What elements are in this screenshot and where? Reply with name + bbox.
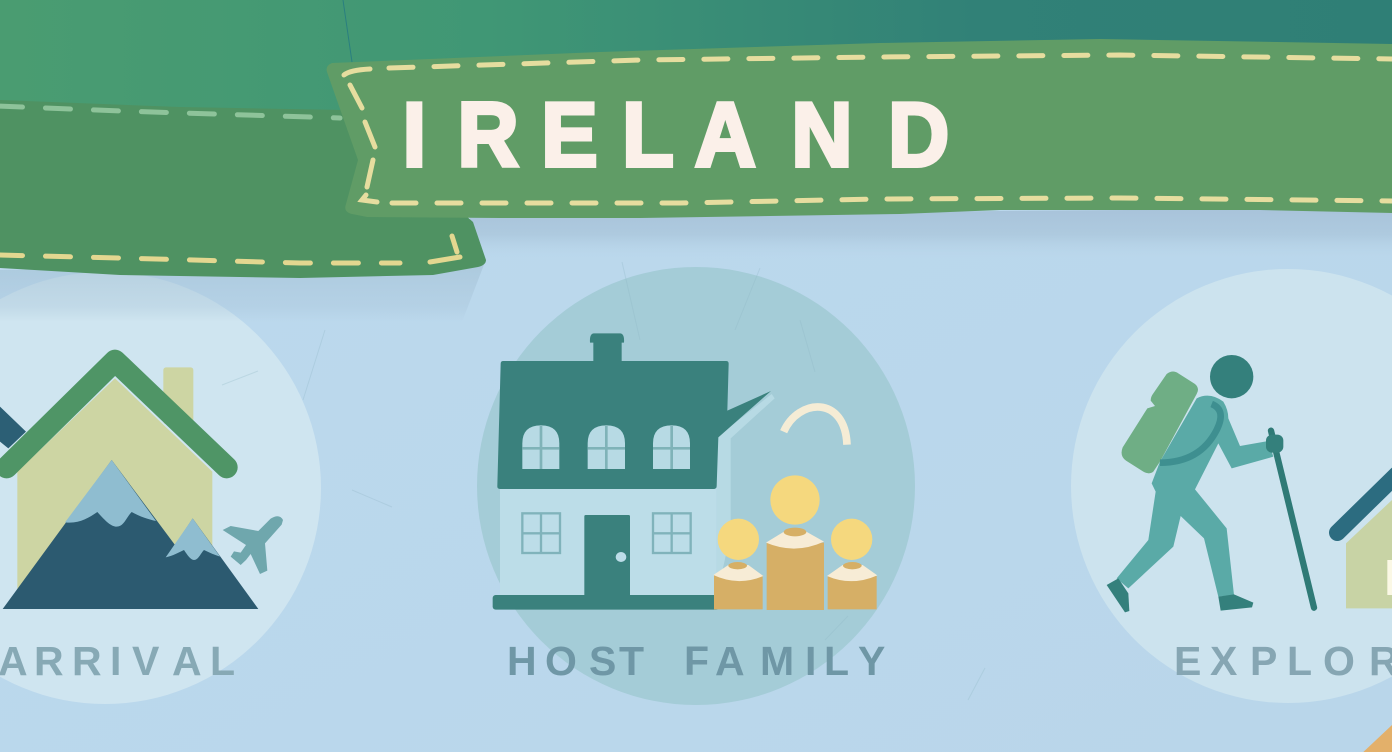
- door knob: [616, 552, 626, 562]
- corner stitching: [430, 236, 460, 262]
- label: arrival: ARRIVAL: [0, 638, 235, 684]
- back boot: [1107, 578, 1129, 612]
- shadow under main ribbon: [470, 208, 1392, 262]
- band seam line: [343, 0, 352, 62]
- left child figure: [713, 519, 763, 609]
- upper windows: [522, 425, 690, 469]
- notch stitching: [344, 69, 377, 202]
- circle: arrival: [0, 272, 321, 704]
- door: [584, 515, 630, 597]
- lower windows: [522, 513, 691, 553]
- house body: [17, 378, 212, 597]
- lower stitching: [0, 255, 400, 263]
- cream arc: [784, 407, 847, 445]
- illustration: arrival house and mountains: [0, 361, 283, 609]
- backpack strap: [1160, 404, 1221, 463]
- big snow cap: [65, 460, 156, 527]
- hiker body: [1117, 396, 1273, 597]
- house side wall: [717, 394, 775, 597]
- ground slab: [493, 595, 719, 610]
- hiker hand: [1266, 435, 1283, 453]
- title: IRELAND: [403, 83, 949, 186]
- right child figure: [827, 519, 877, 609]
- ribbon shape: [0, 100, 486, 278]
- circle: explore: [1071, 269, 1392, 703]
- green roof: [7, 361, 227, 467]
- illustration: host family house: [493, 333, 877, 610]
- upper stitching: [0, 106, 340, 118]
- icon: airplane: [223, 516, 283, 574]
- top green band: [0, 0, 1392, 125]
- label: host family: HOST FAMILY: [507, 638, 885, 684]
- backpack: [1122, 371, 1198, 473]
- hiker head: [1210, 355, 1253, 398]
- lower ribbon: [0, 100, 486, 278]
- house chimney: [163, 367, 193, 424]
- cottage roof: [1337, 474, 1392, 533]
- mountains: [3, 460, 258, 609]
- shadow under lower ribbon: [0, 262, 485, 322]
- parent figure: [766, 475, 824, 610]
- small snow cap: [166, 518, 220, 560]
- illustration: hiker and cottage: [1107, 355, 1392, 752]
- main ribbon: [327, 39, 1392, 218]
- family figures: [713, 475, 877, 610]
- bottom stitching: [392, 198, 1392, 203]
- distant dark roof: [0, 407, 26, 448]
- cottage door: [1387, 560, 1392, 595]
- front boot: [1218, 594, 1253, 611]
- house front wall: [500, 487, 717, 597]
- cottage body: [1346, 500, 1392, 608]
- walking stick: [1271, 431, 1314, 608]
- chimney: [590, 333, 624, 362]
- top stitching: [389, 55, 1392, 68]
- orange corner: [1363, 725, 1392, 752]
- dark roof: [497, 361, 771, 489]
- circle: host family: [477, 267, 915, 705]
